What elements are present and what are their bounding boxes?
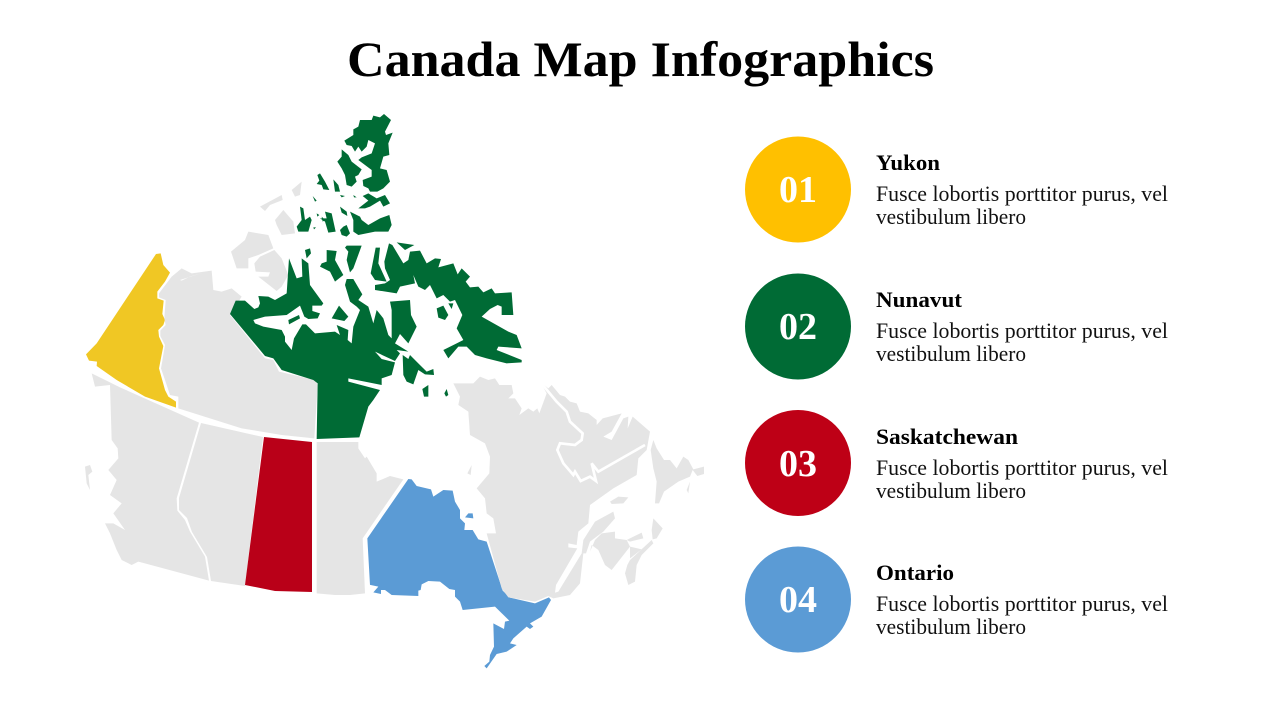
- description: Saskatchewan: [876, 455, 1168, 503]
- arctic islands: Northwest Territories: [231, 182, 302, 291]
- province: Manitoba: [317, 442, 403, 595]
- item 02: Nunavut: [745, 274, 1168, 380]
- description: Saskatchewan: Fusce lobortis porttitor purus, vel: [876, 455, 1168, 480]
- description: Yukon: vestibulum libero: [876, 204, 1026, 229]
- territory: Yukon: [86, 253, 176, 408]
- description: Nunavut: Fusce lobortis porttitor purus, vel: [876, 318, 1168, 343]
- heading: Saskatchewan: Saskatchewan: [876, 424, 1018, 449]
- provinces: Quebec and Atlantic Canada: [453, 377, 704, 602]
- badge 04: [745, 546, 851, 652]
- description: Ontario: vestibulum libero: [876, 614, 1026, 639]
- badge 01: [745, 136, 851, 242]
- description: Saskatchewan: vestibulum libero: [876, 478, 1026, 503]
- description: Ontario: [876, 591, 1168, 639]
- badge 03: [745, 410, 851, 516]
- badge 02: [745, 274, 851, 380]
- badge 03: 03: [779, 443, 817, 485]
- item 01: Yukon: [745, 136, 1168, 242]
- heading: Nunavut: Nunavut: [876, 287, 963, 312]
- description: Yukon: [876, 181, 1168, 229]
- item 04: Ontario: [745, 546, 1168, 652]
- title: Canada Map Infographics: [347, 31, 934, 87]
- description: Yukon: Fusce lobortis porttitor purus, vel: [876, 181, 1168, 206]
- item 03: Saskatchewan: [745, 410, 1168, 516]
- description: Nunavut: [876, 318, 1168, 366]
- badge 02: 02: [779, 306, 817, 348]
- heading: Ontario: Ontario: [876, 560, 954, 585]
- badge 04: 04: [779, 579, 817, 621]
- heading: Yukon: Yukon: [876, 150, 940, 175]
- description: Ontario: Fusce lobortis porttitor purus, vel: [876, 591, 1168, 616]
- territory: Northwest Territories: [159, 268, 318, 438]
- badge 01: 01: [779, 169, 817, 211]
- province: Ontario: [367, 479, 551, 668]
- province: British Columbia: [85, 373, 209, 581]
- province: Saskatchewan: [245, 437, 312, 592]
- description: Nunavut: vestibulum libero: [876, 341, 1026, 366]
- map of Canada: [85, 114, 704, 668]
- territory: Nunavut: [230, 114, 522, 439]
- province: Alberta: [179, 423, 263, 586]
